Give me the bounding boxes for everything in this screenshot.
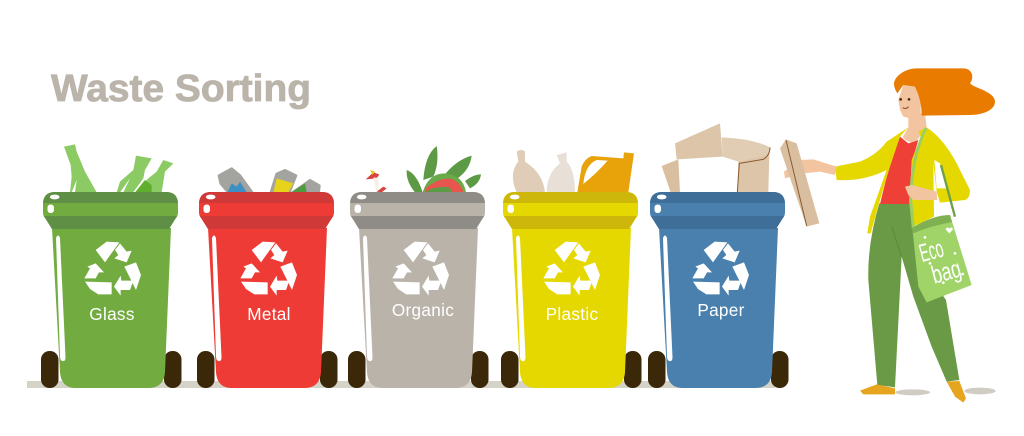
label: Glass	[89, 304, 135, 324]
label: Paper	[697, 300, 745, 320]
bag text: bag	[929, 255, 964, 289]
side gap	[934, 160, 948, 188]
bag decoration dots and heart	[924, 227, 964, 284]
bin body	[501, 192, 642, 388]
label: Plastic	[546, 304, 598, 324]
bag straps	[911, 128, 955, 228]
bin body	[41, 192, 182, 388]
contents: plastic bottles	[513, 150, 634, 193]
recycling icon	[84, 242, 141, 296]
cardigan right	[918, 127, 970, 203]
label: Metal	[247, 304, 291, 324]
bin: plastic	[501, 150, 642, 388]
neck	[903, 113, 927, 142]
outstretched hand	[784, 159, 837, 178]
bin body	[648, 192, 788, 388]
label: Organic	[392, 300, 454, 320]
legs, shoes and shadows	[860, 203, 996, 403]
contents: food waste	[366, 146, 481, 192]
bin: paper	[648, 123, 788, 388]
bin body	[197, 192, 338, 388]
cardigan left	[835, 127, 908, 233]
recycling icon	[692, 242, 749, 296]
bag text	[916, 232, 964, 291]
bin: glass	[41, 144, 182, 388]
front hand	[905, 185, 937, 200]
contents: glass bottles	[64, 144, 173, 192]
title: Waste Sorting	[51, 68, 311, 110]
recycling icon	[543, 242, 600, 296]
bag text: Eco	[916, 235, 947, 268]
shirt	[880, 137, 918, 204]
contents: cans	[219, 169, 319, 192]
recycling icon	[392, 242, 449, 296]
bin: organic	[348, 146, 488, 388]
bin body	[348, 192, 488, 388]
eco bag	[912, 215, 972, 302]
held paper	[780, 139, 819, 227]
woman holding paper	[780, 68, 996, 403]
recycling icon	[240, 242, 297, 296]
head and hair	[894, 68, 995, 128]
upper body	[780, 113, 970, 233]
ground shadow	[27, 381, 775, 388]
bin: metal	[197, 169, 338, 388]
contents: cardboard	[662, 123, 770, 192]
